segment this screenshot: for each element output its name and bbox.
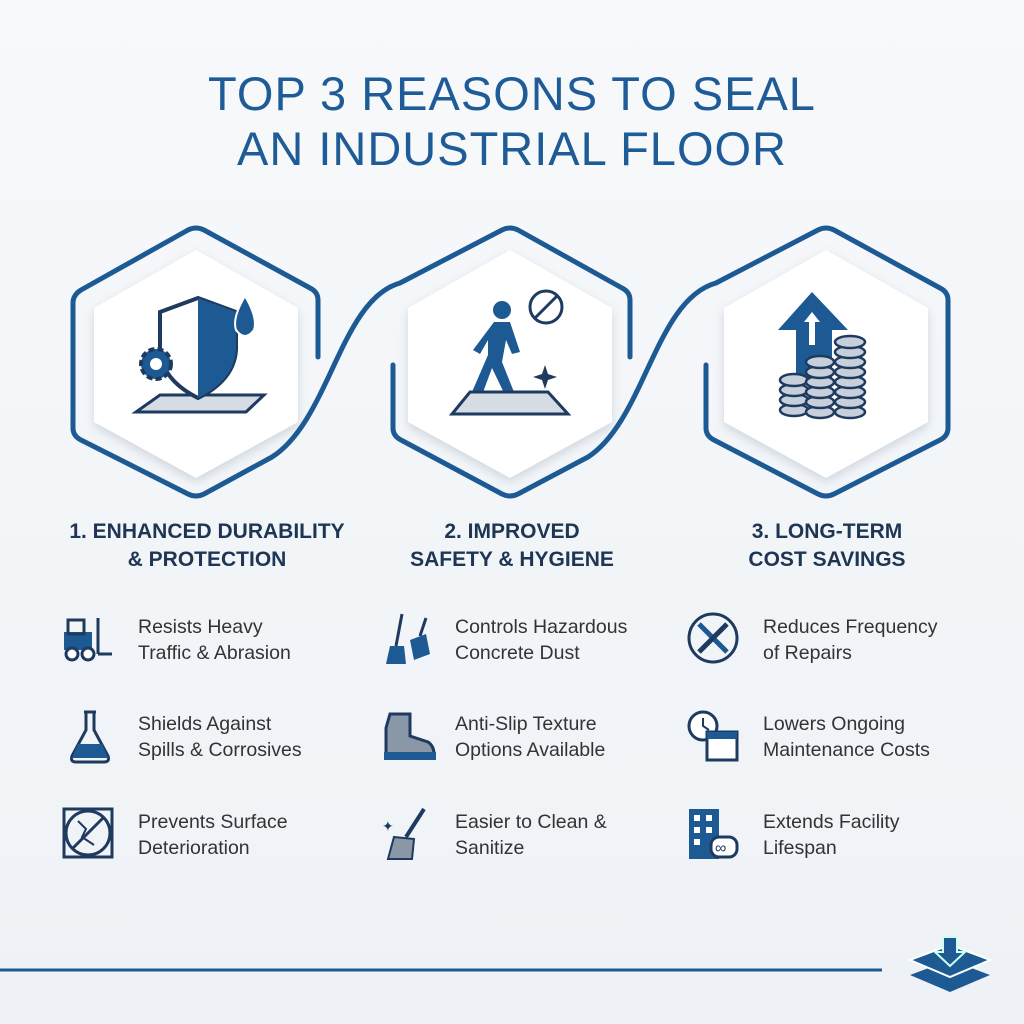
item 1a bbox=[138, 616, 291, 664]
item 2b bbox=[455, 713, 605, 761]
item 2b: Anti-Slip Texture bbox=[455, 713, 597, 735]
icon: building infinity: ∞ bbox=[715, 840, 726, 857]
bottom line bbox=[0, 968, 882, 972]
icon: mop bbox=[382, 808, 426, 860]
heading 3: COST SAVINGS bbox=[748, 548, 906, 571]
heading 2 bbox=[410, 520, 614, 571]
icon: building infinity bbox=[689, 809, 738, 859]
item 2c bbox=[455, 811, 607, 859]
item 2c: Easier to Clean & bbox=[455, 811, 607, 833]
item 3c: Lifespan bbox=[763, 837, 837, 859]
heading 1 bbox=[69, 520, 345, 571]
item 3b: Lowers Ongoing bbox=[763, 713, 905, 735]
icon: no tools bbox=[688, 612, 738, 664]
item 1c: Prevents Surface bbox=[138, 811, 288, 833]
item 1a: Resists Heavy bbox=[138, 616, 263, 638]
icon: mop: ✦ bbox=[382, 818, 394, 834]
title: TOP 3 REASONS TO SEAL bbox=[208, 67, 816, 120]
item 3a: Reduces Frequency bbox=[763, 616, 938, 638]
item 2a bbox=[455, 616, 627, 664]
item 3b: Maintenance Costs bbox=[763, 739, 930, 761]
icon: boot bbox=[384, 712, 436, 760]
heading 1: & PROTECTION bbox=[128, 548, 286, 571]
icon: walking person bbox=[452, 291, 568, 414]
icon: broom and dustpan bbox=[386, 614, 430, 664]
title bbox=[208, 67, 816, 175]
item 2b: Options Available bbox=[455, 739, 605, 761]
heading 2: 2. IMPROVED bbox=[444, 520, 580, 543]
icon: flask bbox=[70, 710, 110, 764]
icon: no cracks bbox=[62, 808, 114, 858]
icon: forklift bbox=[64, 618, 112, 662]
item 2c: Sanitize bbox=[455, 837, 524, 859]
item 1b: Shields Against bbox=[138, 713, 271, 735]
title: AN INDUSTRIAL FLOOR bbox=[237, 122, 787, 175]
item 3c: Extends Facility bbox=[763, 811, 900, 833]
item 1a: Traffic & Abrasion bbox=[138, 642, 291, 664]
item 1b bbox=[138, 713, 302, 761]
heading 2: SAFETY & HYGIENE bbox=[410, 548, 614, 571]
item 3a bbox=[763, 616, 938, 664]
item 2a: Controls Hazardous bbox=[455, 616, 627, 638]
item 3c bbox=[763, 811, 900, 859]
icon: arrow and coins bbox=[778, 292, 865, 418]
heading 3 bbox=[748, 520, 906, 571]
item 2a: Concrete Dust bbox=[455, 642, 580, 664]
heading 1: 1. ENHANCED DURABILITY bbox=[69, 520, 345, 543]
inner hexes bbox=[94, 250, 928, 478]
icon: shield, gear, drop, floor bbox=[136, 296, 264, 412]
item 1c bbox=[138, 811, 288, 859]
icon: clock calendar bbox=[688, 710, 738, 762]
icon: layers bbox=[910, 937, 990, 992]
item 1c: Deterioration bbox=[138, 837, 250, 859]
item 3b bbox=[763, 713, 930, 761]
heading 3: 3. LONG-TERM bbox=[752, 520, 902, 543]
item 3a: of Repairs bbox=[763, 642, 852, 664]
item 1b: Spills & Corrosives bbox=[138, 739, 302, 761]
